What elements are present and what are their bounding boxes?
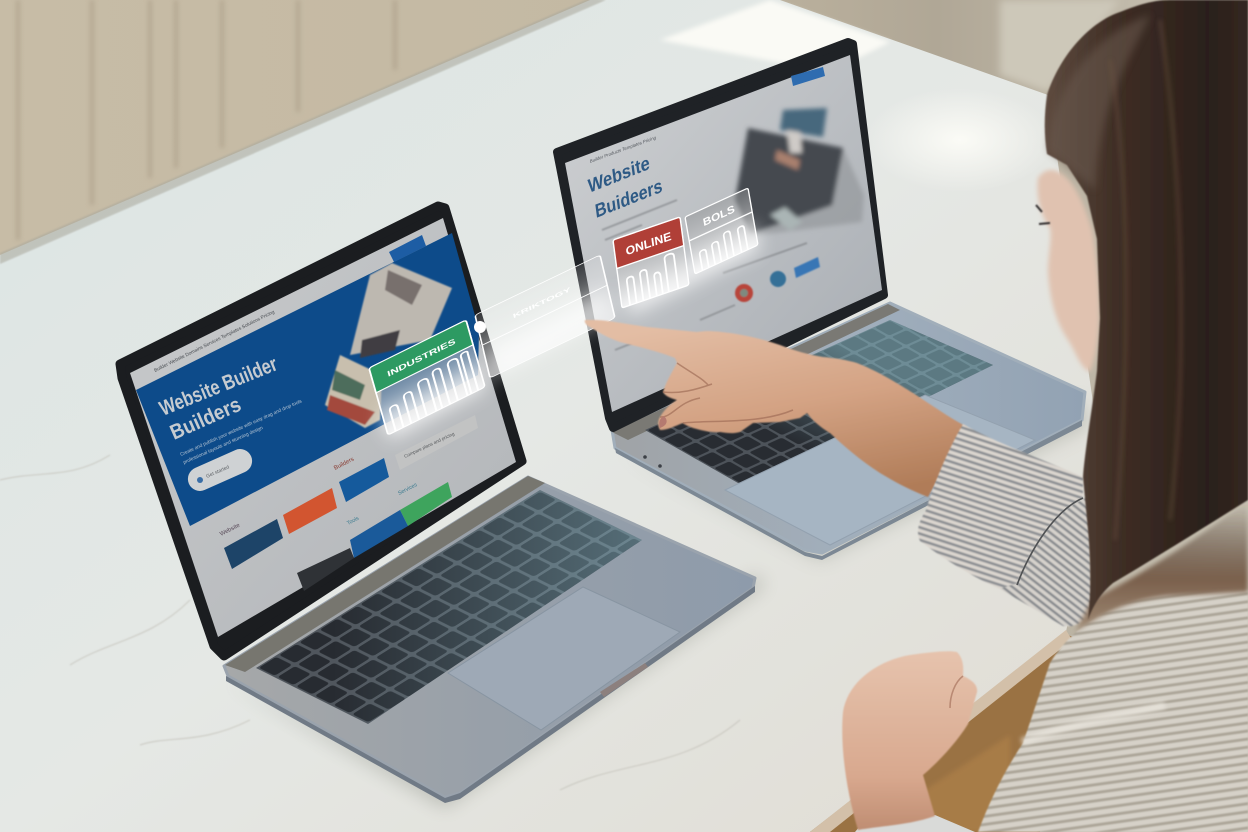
laptop right (rear)	[557, 42, 1090, 560]
front laptop screen: Builders	[333, 457, 355, 472]
rear laptop screen	[565, 55, 882, 412]
front edge notch	[600, 663, 648, 697]
fingernail	[659, 416, 667, 428]
dark dock	[297, 548, 354, 591]
shadow of rear laptop	[620, 400, 1090, 560]
rear screen top button	[791, 67, 825, 86]
rear laptop keyboard	[645, 320, 993, 487]
hair highlights	[1110, 20, 1181, 540]
rear laptop base	[612, 303, 1085, 553]
sweater highlight	[1022, 705, 1165, 742]
blue feature button	[339, 458, 389, 502]
glow behind cards	[380, 225, 760, 440]
front laptop screen: Services	[397, 482, 419, 497]
green feature button	[400, 482, 452, 526]
rear laptop screen bezel	[557, 42, 884, 428]
front laptop screen: Compare plans and pricing	[403, 431, 456, 459]
orange feature button	[283, 488, 337, 534]
hero body text: professional layouts and stunning design	[182, 425, 264, 466]
front laptop screen bezel	[120, 206, 522, 656]
front laptop screen: Tools	[346, 516, 360, 527]
hair crown shading	[1048, 15, 1150, 190]
resting hand knuckle line	[950, 676, 963, 708]
finger shading	[660, 363, 793, 423]
card: grey	[685, 188, 758, 274]
rear screen heading: Website	[587, 153, 651, 198]
striped cuff	[918, 424, 1083, 589]
person	[585, 0, 1248, 832]
blue hero panel	[136, 233, 479, 526]
rear screen nav: Builder Products Templates Pricing	[590, 135, 657, 164]
card: grey: BOLS	[702, 204, 736, 229]
resting hand	[842, 651, 977, 830]
hero button	[184, 445, 256, 495]
rear laptop ports	[643, 455, 662, 468]
eye lashes	[1036, 205, 1050, 224]
front laptop base	[224, 477, 755, 797]
hero body text: Create and publish your website with easy drag and drop tools	[179, 398, 303, 458]
laptop left (front)	[120, 206, 765, 808]
card: red	[613, 217, 689, 308]
feature labels: Website	[219, 522, 242, 538]
front hinge strip	[225, 476, 545, 672]
hero heading: Website Builder	[156, 352, 281, 421]
rear screen heading: Buideers	[594, 176, 664, 223]
hair	[1045, 0, 1248, 620]
rear hinge strip	[612, 304, 900, 440]
second blue feature button	[350, 510, 408, 558]
front laptop screen	[130, 218, 516, 637]
hero button: Get started	[205, 464, 231, 480]
collage photos	[325, 263, 452, 428]
card: red: ONLINE	[625, 229, 672, 258]
sweater body	[978, 589, 1248, 832]
lower arm sleeve	[855, 815, 975, 832]
nav items: Builder Website Domains Services Templates Solutions Pricing	[153, 309, 276, 374]
rear screen icons	[735, 257, 820, 302]
cuff fold	[1017, 498, 1083, 585]
shadow of front laptop	[225, 575, 765, 808]
rear laptop trackpad	[725, 395, 1035, 545]
wooden table edge and floor	[810, 630, 1090, 832]
top button	[389, 235, 426, 262]
front laptop trackpad	[448, 587, 680, 730]
rear screen heading	[587, 153, 664, 223]
hero heading: Builders	[167, 393, 245, 445]
lower grey pill	[395, 415, 478, 470]
navy feature button	[224, 519, 283, 569]
card: connecting translucent	[475, 255, 615, 378]
front laptop keyboard	[256, 490, 642, 724]
card: green: INDUSTRIES	[386, 337, 457, 379]
card: connecting translucent: KRIKTOGY	[512, 286, 572, 320]
pointing arm and hand	[585, 320, 967, 497]
rear screen body lines	[602, 200, 807, 350]
card: green	[369, 320, 485, 435]
striped upper sleeve	[1000, 497, 1092, 626]
hair end blending into sweater	[1075, 500, 1248, 632]
connector dot	[474, 321, 486, 333]
face	[1038, 170, 1099, 372]
floating comparison cards	[369, 188, 760, 440]
rear screen photo	[735, 108, 864, 236]
hero heading	[156, 352, 281, 445]
